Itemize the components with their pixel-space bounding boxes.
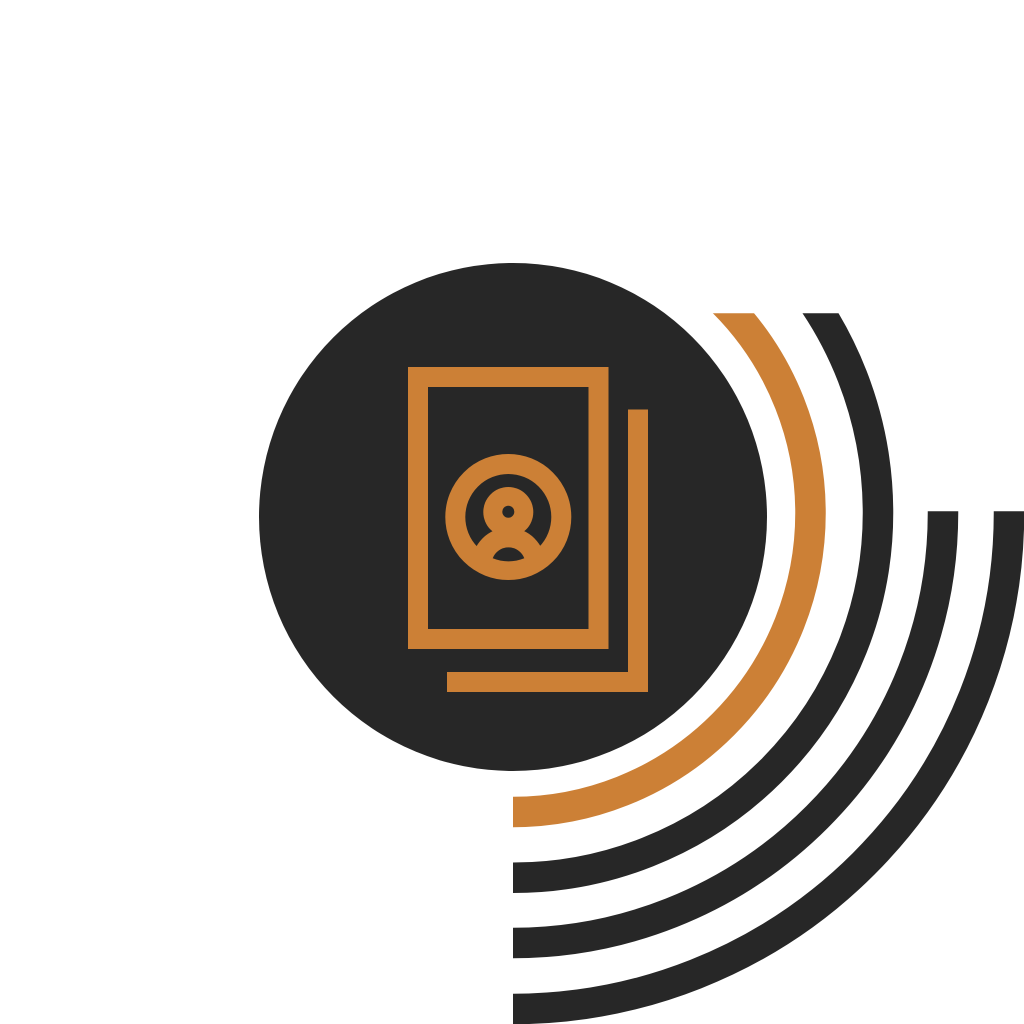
arc: outermost dark <box>513 511 1024 1024</box>
body cutout <box>493 547 524 561</box>
person body <box>476 531 540 558</box>
icon: profile badge <box>455 464 561 601</box>
dark circle background <box>259 263 767 771</box>
arc: second dark <box>513 511 958 958</box>
person head <box>483 487 533 537</box>
arc: third dark <box>513 313 894 893</box>
arc: orange <box>513 215 810 812</box>
infographic: document icon with concentric arcs <box>259 263 1024 1024</box>
icon: profile documents <box>418 377 638 682</box>
icon: front document outline <box>418 377 598 639</box>
badge ring <box>455 464 561 570</box>
head centre dot <box>502 506 514 518</box>
icon: back document edge <box>447 410 638 682</box>
